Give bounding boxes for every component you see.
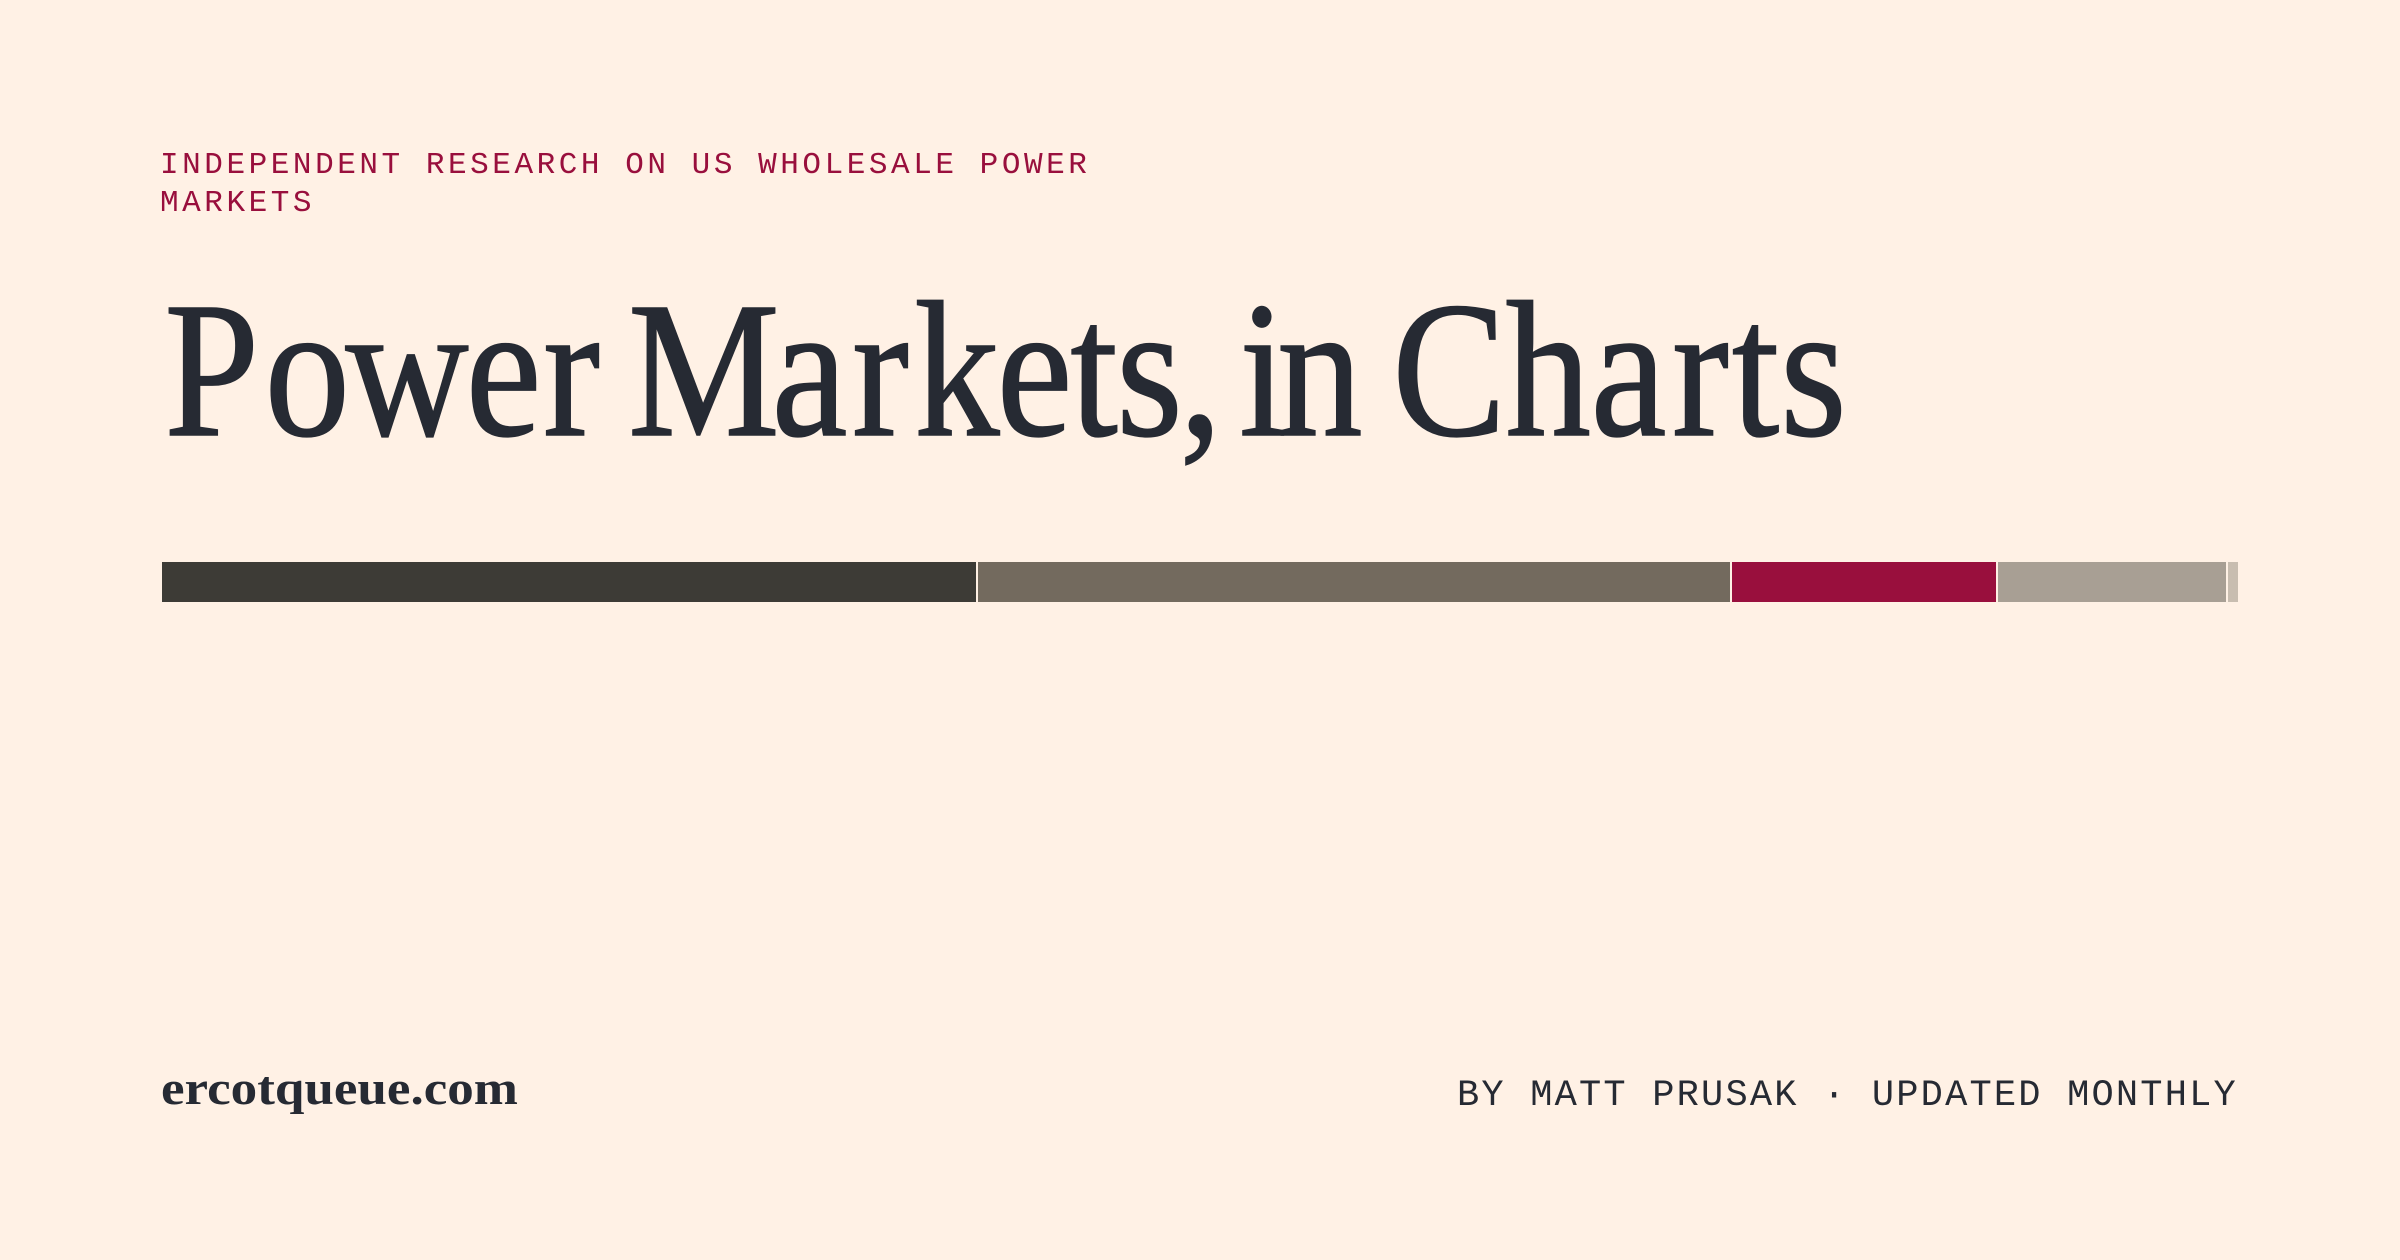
byline: BY MATT PRUSAK · UPDATED MONTHLY bbox=[1457, 1075, 2238, 1117]
kicker: independent research: MARKETS bbox=[160, 186, 315, 221]
site name: ercotqueue.com bbox=[161, 1062, 518, 1115]
kicker: independent research bbox=[160, 148, 1090, 221]
kicker: independent research: INDEPENDENT RESEARCH ON US WHOLESALE POWER bbox=[160, 148, 1090, 183]
title: Power Markets, in Charts bbox=[164, 262, 1847, 477]
stacked bar bbox=[162, 562, 2238, 602]
